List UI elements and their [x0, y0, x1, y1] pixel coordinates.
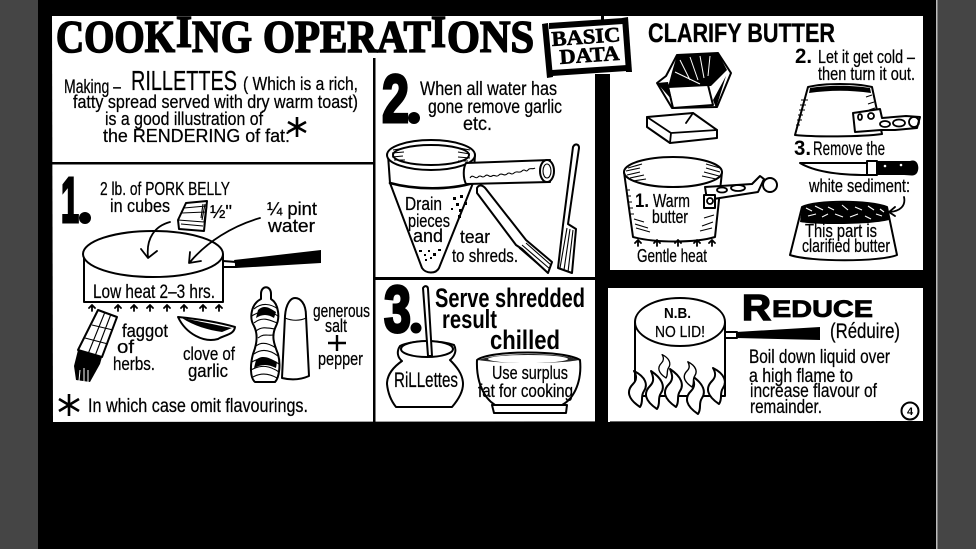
text: warm butter: Warm [653, 191, 690, 211]
text: salt and pepper: pepper [318, 349, 363, 369]
text: reduire: (Réduire) [830, 320, 900, 343]
icon: asterisk [288, 117, 306, 137]
icon: pepper mill [251, 287, 279, 382]
stamp: basic data: BASIC [551, 22, 621, 51]
icon: rillettes pot [387, 286, 463, 407]
text: herbs [113, 321, 168, 374]
icon: garlic clove [178, 317, 235, 340]
text: herbs: of [117, 337, 135, 357]
text: garlic: clove of [183, 344, 236, 364]
icon: heat arrows [89, 305, 222, 311]
icon: pot on flames: N.B. [664, 305, 691, 322]
heading: reduce: R [742, 287, 771, 328]
text: pork belly: 2 lb. of PORK BELLY [100, 179, 230, 199]
icon: sieve [387, 140, 554, 272]
heading: reduce: EDUCE [772, 296, 873, 323]
icon: turned out butter [795, 84, 920, 136]
title: COOK [56, 12, 175, 62]
text: boil down: a high flame to [749, 366, 853, 387]
title: I [431, 7, 446, 57]
arrow: pork into pan [141, 222, 170, 258]
text: herbs: faggot [122, 321, 168, 341]
text: gentle heat: Gentle heat [637, 246, 707, 266]
text: making rillettes [64, 65, 358, 146]
panel: comic page background [52, 14, 924, 422]
text: step 2 let it get cold: Let it get cold – [818, 47, 915, 67]
icon: pot on flames: NO LID! [655, 324, 705, 341]
icon: bowl of surplus fat: fat for cooking [478, 381, 573, 401]
step number 2: 2 [382, 61, 409, 137]
heading: reduce [742, 287, 873, 328]
title: ONS [447, 12, 534, 62]
text: making rillettes: the RENDERING of fat: [103, 126, 290, 146]
text: remove garlic: etc. [463, 114, 492, 135]
title [56, 7, 534, 62]
text: water: water [267, 216, 315, 236]
icon: knife [800, 160, 918, 176]
step number 1: 1 [61, 164, 79, 236]
text: step 2 let it get cold [795, 45, 915, 84]
title: NG [192, 12, 252, 62]
text: serve shredded: result [442, 304, 497, 334]
text: remove garlic: gone remove garlic [428, 97, 562, 118]
icon: gentle heat arrows [635, 240, 715, 246]
icon: pork cube [178, 201, 207, 231]
text: white sediment: white sediment: [808, 176, 910, 196]
icon: butter in wrapper [657, 53, 731, 108]
text: tear to shreds: tear [460, 227, 490, 247]
text: pork belly: ½" [210, 202, 232, 222]
icon: saucepan [83, 231, 321, 302]
text: drain pieces [405, 194, 450, 246]
text: water [267, 199, 317, 236]
text: remove the: Remove the [813, 139, 885, 160]
step number 3: 3 [384, 272, 411, 346]
text: making rillettes: Making – [64, 77, 121, 98]
text: warm butter [635, 191, 690, 227]
text: making rillettes: RILLETTES [131, 65, 237, 96]
text: tear to shreds [452, 227, 518, 266]
text: salt and pepper [313, 301, 370, 369]
icon: faggot of herbs [74, 310, 117, 382]
title: OPERAT [263, 12, 431, 62]
panel: step 1 [59, 164, 370, 417]
icon: flames [629, 355, 725, 414]
icon: clarified butter mould: This part is [805, 221, 877, 241]
text: garlic [183, 344, 236, 381]
icon: bowl of surplus fat [477, 352, 580, 413]
text: remove the: 3. [794, 137, 811, 160]
icon: fork two [558, 144, 579, 273]
text: drain pieces: pieces [408, 211, 450, 231]
icon: clarified butter mould [790, 202, 897, 260]
heading: CLARIFY BUTTER [648, 18, 835, 48]
text: boil down [749, 347, 891, 418]
icon: bowl of surplus fat: Use surplus [492, 363, 568, 383]
text: drain pieces: Drain [405, 194, 442, 214]
text: boil down: Boil down liquid over [749, 347, 891, 368]
text: making rillettes: is a good illustration of [105, 109, 264, 129]
text: boil down: increase flavour of [750, 381, 878, 402]
panel: step 2 [382, 61, 579, 273]
page number: 4 [907, 406, 914, 418]
text: making rillettes: ( Which is a rich, [243, 74, 358, 94]
text: salt and pepper: generous [313, 301, 370, 321]
text: warm butter: butter [652, 207, 688, 227]
panel: clarify butter [624, 18, 920, 266]
text: serve shredded [435, 283, 585, 355]
text: low heat: Low heat 2–3 hrs. [93, 282, 215, 303]
text: garlic: garlic [188, 361, 228, 381]
page number [902, 402, 918, 420]
text: boil down: remainder. [750, 397, 822, 418]
text: salt and pepper: salt [325, 316, 347, 336]
panel: intro [64, 65, 358, 146]
text: herbs: herbs. [113, 354, 155, 374]
text: serve shredded: Serve shredded [435, 283, 585, 313]
icon: pot on flames [629, 298, 820, 414]
text: making rillettes: fatty spread served with dry warm toast) [73, 92, 358, 112]
panel: step 3 [384, 272, 585, 413]
icon: butter block [647, 113, 717, 143]
text: pork belly [100, 179, 232, 222]
text: warm butter: 1. [635, 191, 649, 212]
arrow: water into pan [189, 218, 260, 263]
text: remove the [794, 137, 885, 160]
icon: rillettes pot: RiLLettes [394, 369, 458, 392]
stamp: basic data: DATA [559, 41, 621, 69]
text: remove garlic: When all water has [420, 79, 557, 100]
text: tear to shreds: to shreds. [452, 246, 518, 266]
text: step 2 let it get cold: then turn it out. [818, 64, 915, 84]
icon: fork one [477, 185, 552, 273]
icon: warm butter pan [624, 157, 777, 242]
arrow: sediment [889, 197, 904, 216]
icon: salt shaker [282, 298, 309, 379]
text: drain pieces: and [413, 226, 443, 246]
panel: reduce [629, 287, 918, 420]
title: I [176, 7, 192, 57]
text: step 2 let it get cold: 2. [795, 45, 812, 68]
text: remove garlic [420, 79, 562, 135]
text: water: ¼ pint [267, 199, 317, 219]
stamp: basic data [542, 17, 632, 78]
icon: clarified butter mould: clarified butter [802, 236, 890, 256]
text: pork belly: in cubes [110, 196, 170, 216]
footnote: In which case omit flavourings. [88, 396, 308, 417]
text: serve shredded: chilled [490, 325, 560, 355]
